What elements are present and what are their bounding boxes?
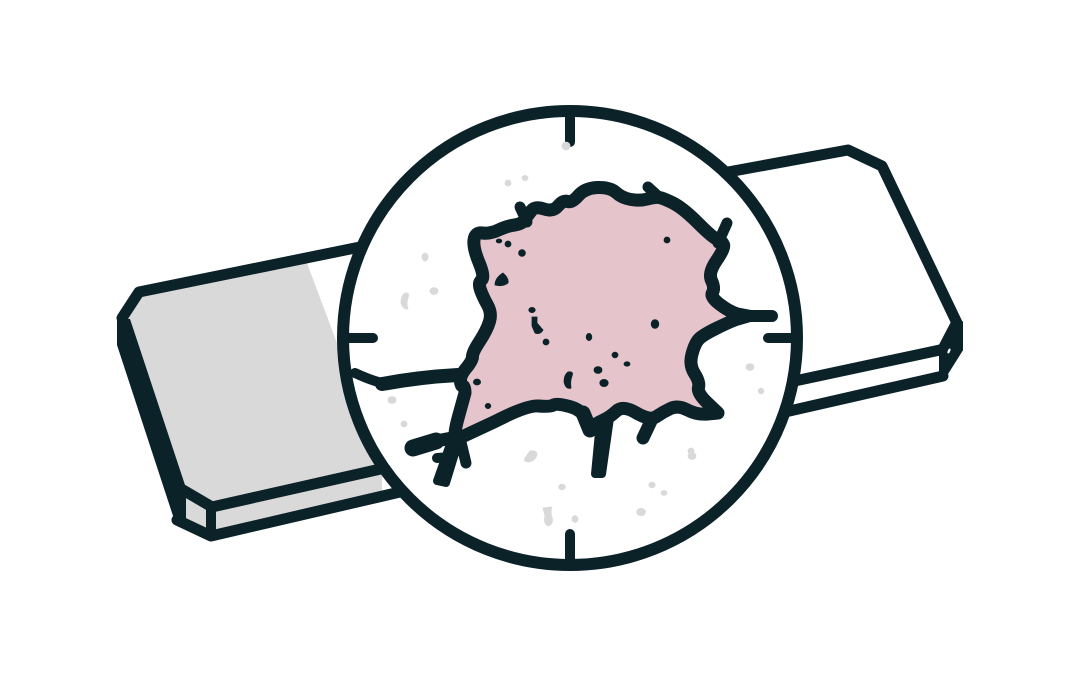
cell projections [355, 187, 772, 483]
slide: right end with white label area [728, 150, 962, 412]
grey debris specks [388, 142, 764, 526]
dark organelle dots [473, 237, 670, 409]
slide: left end with grey sample area [117, 247, 400, 536]
cell [355, 187, 772, 483]
cell body outline [455, 187, 748, 439]
crosshair ticks [342, 112, 798, 563]
magnifier circle [343, 111, 797, 565]
